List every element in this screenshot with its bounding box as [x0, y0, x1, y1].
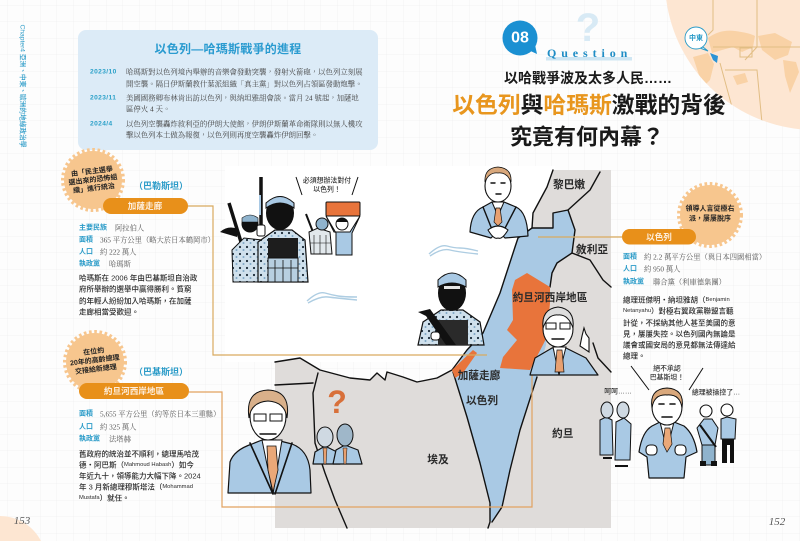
timeline row 2023/10 [90, 68, 363, 88]
timeline row 2023/10: 2023/10 [90, 68, 117, 76]
page numbers [14, 515, 786, 528]
page numbers: 153 [14, 515, 31, 527]
israel facts: 人口 [623, 264, 637, 272]
israel facts [623, 252, 766, 286]
section: gaza [79, 180, 215, 316]
burst: democratic election note [63, 150, 123, 210]
chapter side label: Chapter4 亞洲、中東、歐洲的地緣政治學 [18, 24, 28, 148]
israel paragraph [623, 294, 736, 360]
gaza facts: 面積 [79, 234, 93, 244]
Netanyahu centre [639, 388, 697, 478]
gaza paragraph: 府所舉辦的選舉中贏得勝利。貧窮 [79, 284, 192, 294]
illustration: Abbas portrait [228, 390, 311, 494]
gaza facts: 哈瑪斯 [109, 260, 132, 268]
main title: 以色列與哈瑪斯激戰的背後 [452, 92, 726, 118]
pill: west bank: 約旦河西岸地區 [104, 385, 164, 396]
timeline row 2023/10: 哈瑪斯對以色列境內舉辦的音樂會發動突襲，發射火箭砲，以色列立刻展 [126, 68, 363, 76]
west bank orange [500, 273, 550, 370]
decoration: peach corner circle bottom left [0, 516, 41, 541]
map labels: 黎巴嫩 [553, 178, 585, 191]
west bank facts: 面積 [79, 408, 93, 418]
israel facts: 聯合黨（利庫德集團） [653, 278, 726, 286]
map labels: 加薩走廊 [458, 369, 501, 382]
gaza facts: 執政黨 [79, 258, 100, 268]
timeline row 2023/11: 區停火 4 天。 [126, 104, 170, 114]
burst: 20 year leader note: 交接給新總理 [74, 362, 117, 376]
large militant [258, 230, 308, 282]
map labels: 埃及 [427, 453, 449, 466]
timeline row 2024/4: 擊以色列本土做為報復，以色列則再度空襲轟炸伊朗回擊。 [126, 130, 318, 140]
israel paragraph: 計從，不採納其他人甚至美國的意 [623, 318, 736, 328]
timeline row 2023/10: 開空襲。隔日伊斯蘭教什葉派組織「真主黨」對以色列占領區發動炮擊。 [126, 80, 363, 88]
israel facts: 約 2.2 萬平方公里（與日本四國相當） [644, 252, 766, 262]
gaza paragraph: 走廊相當受歡迎。 [79, 306, 139, 316]
illustration: two officials in keffiyeh [313, 424, 362, 464]
west bank paragraph: 年近九十，領導能力大幅下降。2024 [79, 470, 201, 480]
israel paragraph: Netanyahu）對極右翼政黨聯盟言聽 [623, 306, 734, 316]
decoration: peach corner circle top right [666, 0, 800, 129]
gaza facts: 主要民族 [79, 222, 107, 232]
map labels: 敘利亞 [576, 243, 608, 256]
west bank paragraph: 舊政府的統治並不順利，總理馬哈茂 [79, 448, 199, 458]
burst: 20 year leader note: 在位約 [83, 345, 105, 357]
illustration: armed militants group [220, 177, 308, 282]
gaza facts: 阿拉伯人 [115, 224, 145, 232]
illustration: West Bank new premier [530, 307, 598, 375]
question badge: ? [576, 6, 600, 50]
burst: 20 year leader note [65, 332, 125, 392]
west bank paragraph: 年 3 月新總理穆斯塔法（Mohammad [79, 482, 193, 492]
west bank paragraph: Mustafa）就任。 [79, 492, 130, 502]
israel territory [453, 210, 575, 522]
question badge: Question [547, 46, 632, 60]
west bank facts [79, 408, 220, 444]
soldier and aide [697, 404, 736, 466]
wave marks [307, 246, 478, 303]
section: gaza: （巴勒斯坦） [134, 180, 188, 191]
map labels [427, 178, 608, 466]
gaza facts: 人口 [79, 248, 93, 256]
map land grey [275, 170, 611, 528]
section: west bank [79, 366, 220, 502]
panel: war timeline [78, 30, 378, 150]
number bubble 08: 08 [511, 30, 529, 46]
burst: israel leader note: 派，屢屢脫序 [689, 214, 731, 222]
timeline row 2024/4 [90, 120, 363, 140]
icon: question mark: ? [327, 384, 347, 420]
section: israel [622, 229, 766, 360]
map labels: 以色列 [466, 394, 498, 407]
israel paragraph: 總理。 [623, 350, 646, 360]
west bank facts: 人口 [79, 422, 93, 430]
small militant [232, 238, 268, 282]
main title: 以哈戰爭波及太多人民…… [504, 70, 672, 86]
burst: democratic election note: 織」進行統治 [73, 181, 115, 195]
burst: democratic election note: 選出來的恐怖組 [68, 172, 118, 187]
speech caption [296, 176, 358, 195]
gaza paragraph [79, 272, 198, 316]
speech caption [604, 364, 740, 396]
timeline row 2024/4: 以色列空襲轟炸敘利亞的伊朗大使館，伊朗伊斯蘭革命衛隊則以無人機攻 [126, 120, 363, 128]
west bank facts: 執政黨 [79, 434, 100, 442]
map labels: 約旦 [552, 427, 574, 440]
burst: 20 year leader note: 20年的高齡總理 [69, 353, 120, 368]
pill: israel [622, 229, 696, 244]
speech caption: 絕不承認 [653, 364, 681, 372]
pill: west bank [79, 383, 189, 399]
icon: middle east location bubble [685, 27, 718, 63]
main title [452, 70, 726, 150]
page numbers: 152 [769, 516, 786, 528]
burst: democratic election note: 由「民主選舉 [71, 164, 113, 178]
connector lines [188, 206, 622, 507]
west bank facts: 法塔赫 [109, 434, 132, 444]
Arab advisers [600, 402, 631, 466]
speech caption: 必須想辦法對付 [303, 176, 351, 184]
speech caption: 以色列！ [313, 184, 341, 194]
illustration: Netanyahu top [470, 167, 528, 238]
gaza paragraph: 的年輕人紛紛加入哈瑪斯，在加薩 [79, 296, 192, 306]
israel paragraph: 見，屢屢失控。以色列國內無論是 [623, 328, 736, 338]
timeline row 2024/4: 2024/4 [90, 120, 113, 128]
west bank facts: 約 325 萬人 [100, 422, 137, 432]
burst: israel leader note: 領導人言從極右 [686, 204, 734, 212]
section: west bank: （巴基斯坦） [134, 366, 188, 377]
gaza orange [452, 350, 477, 378]
illustration: central militant [418, 273, 484, 345]
gaza facts: 365 平方公里（略大於日本鶴岡市） [100, 236, 215, 244]
question badge [502, 6, 632, 60]
west bank facts: 5,655 平方公里（約等於日本三重縣） [100, 410, 220, 418]
israel facts: 約 950 萬人 [644, 264, 681, 274]
burst: israel leader note [679, 184, 741, 246]
pill: gaza: 加薩走廊 [128, 200, 163, 211]
gaza facts: 約 222 萬人 [100, 248, 137, 256]
illustration: Netanyahu with advisers [600, 364, 740, 478]
illustration: protesters with sign [296, 176, 360, 255]
main title: 究竟有何內幕？ [510, 124, 664, 150]
icon: middle east location bubble: 中東 [689, 33, 703, 42]
speech caption: 巴基斯坦！ [650, 372, 684, 382]
israel paragraph: 總理班傑明・納坦雅胡（Benjamin [623, 294, 730, 304]
map labels: 約旦河西岸地區 [513, 291, 588, 304]
speech caption: 總理被操控了… [692, 388, 740, 396]
gaza paragraph: 哈瑪斯在 2006 年由巴基斯坦自治政 [79, 272, 198, 282]
timeline row 2023/11: 2023/11 [90, 94, 116, 102]
israel facts: 面積 [623, 252, 637, 260]
gaza facts [79, 222, 215, 268]
map borders [275, 170, 611, 528]
west bank paragraph: 德・阿巴斯（Mahmoud Habash）如今 [79, 460, 194, 470]
rifles [259, 177, 263, 226]
west bank paragraph [79, 448, 201, 502]
map [275, 170, 611, 528]
israel paragraph: 議會或國安局的意見都無法傳達給 [623, 340, 736, 350]
timeline row 2023/11 [90, 94, 359, 114]
timeline row 2023/11: 美國國務卿布林肯出訪以色列，與納坦雅胡會談。當月 24 號起，加薩地 [126, 94, 359, 102]
israel facts: 執政黨 [623, 276, 644, 286]
timeline heading: 以色列—哈瑪斯戰爭的進程 [154, 41, 302, 56]
speech caption: 呵呵…… [604, 388, 632, 396]
pill: israel: 以色列 [646, 231, 672, 242]
